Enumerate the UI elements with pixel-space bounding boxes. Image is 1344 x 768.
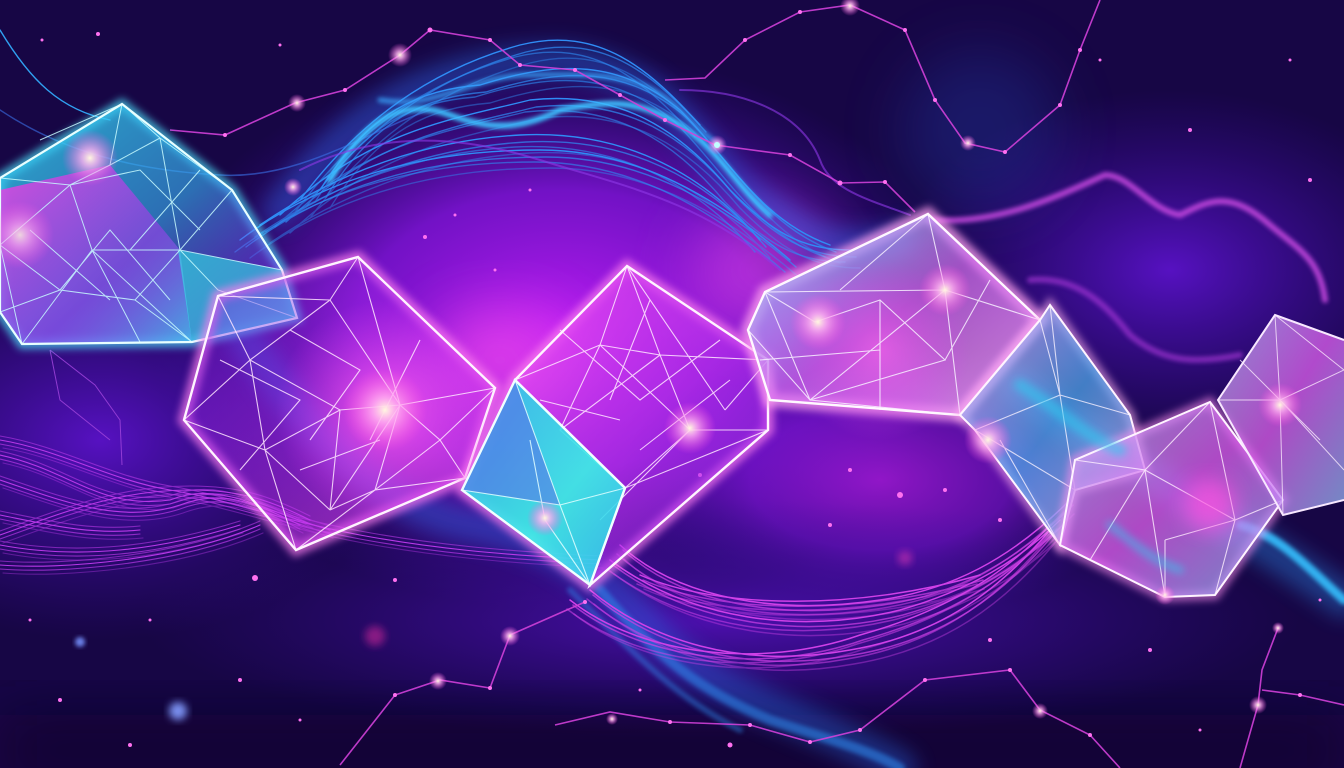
crystal 5: right blue polyhedron xyxy=(960,305,1145,545)
magenta flowing energy strands xyxy=(0,90,1325,670)
crystal 6: lower right polyhedron xyxy=(1060,402,1283,605)
crystal 2: left magenta polyhedron xyxy=(184,257,495,550)
crystal 1: left cyan polyhedron xyxy=(0,104,297,344)
crystal 3: central magenta polyhedron xyxy=(462,266,768,585)
crystal 4: right pale polyhedron xyxy=(748,214,1040,440)
cyan energy highlight xyxy=(714,142,1180,570)
crystal 7: far right polyhedron xyxy=(1218,315,1344,515)
crystal 3 cyan facet xyxy=(462,380,625,585)
